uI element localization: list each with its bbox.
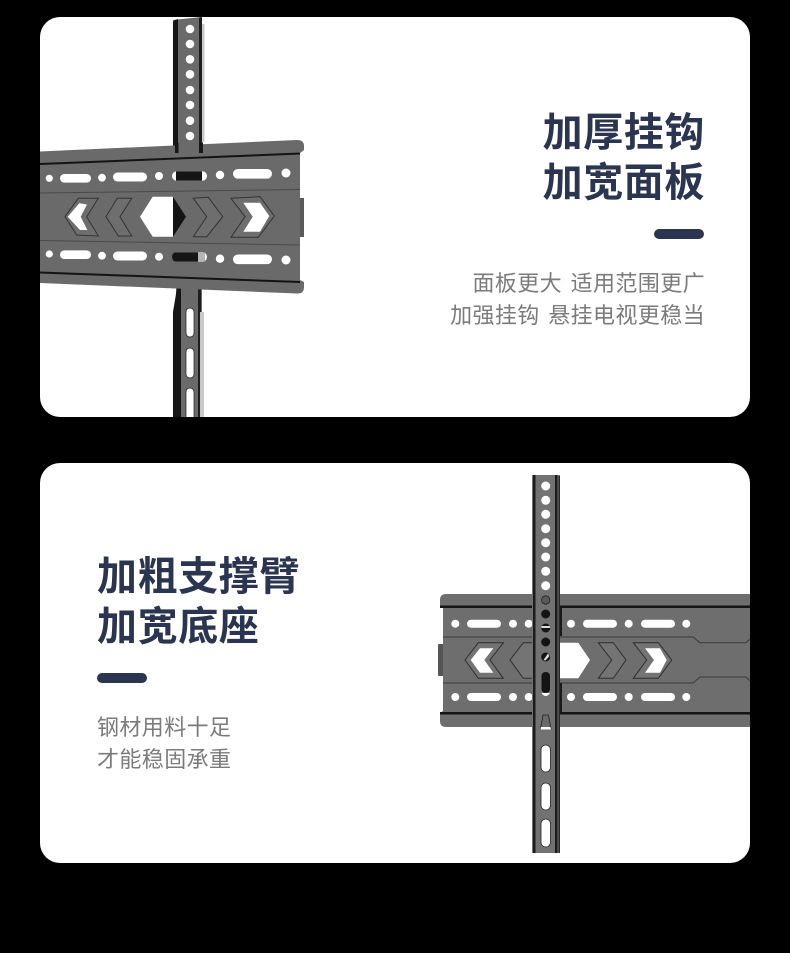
arm holes	[541, 482, 550, 590]
text block: top card description: 加强挂钩 悬挂电视更稳当	[450, 303, 705, 328]
vertical arm	[532, 475, 560, 853]
heading: bottom card title	[97, 555, 300, 649]
heading: bottom card title: 加粗支撑臂	[97, 555, 300, 599]
accent bar: bottom card	[97, 673, 147, 683]
accent bar: top card	[654, 229, 704, 239]
mounting holes	[451, 620, 690, 701]
text block: top card description: 面板更大 适用范围更广	[472, 271, 705, 296]
text block: bottom card description: 钢材用料十足	[97, 715, 231, 740]
plate	[438, 594, 750, 727]
panel: bottom card background	[40, 463, 750, 863]
plate	[40, 140, 304, 294]
heading: bottom card title: 加宽底座	[97, 605, 259, 649]
panel: top card background	[40, 17, 750, 417]
text block: bottom card description	[97, 715, 231, 772]
top bracket: front view, angled	[40, 17, 304, 428]
bottom bracket: front view	[438, 475, 750, 853]
illustration: wall mount brackets	[40, 17, 750, 853]
shadow beside vertical arm	[560, 608, 562, 712]
mounting holes, lower row	[46, 250, 291, 264]
text block: bottom card description: 才能稳固承重	[97, 747, 231, 772]
text block: top card description	[450, 271, 705, 328]
heading: top card title: 加厚挂钩	[543, 111, 705, 155]
heading: top card title	[543, 111, 705, 205]
vertical arm, lower part	[173, 288, 204, 428]
chevrons and centre hexagon	[65, 197, 274, 237]
vertical arm, upper part	[173, 17, 204, 152]
mounting holes, upper row	[46, 168, 291, 183]
heading: top card title: 加宽面板	[543, 161, 705, 205]
chevrons and centre hexagon	[465, 643, 672, 678]
